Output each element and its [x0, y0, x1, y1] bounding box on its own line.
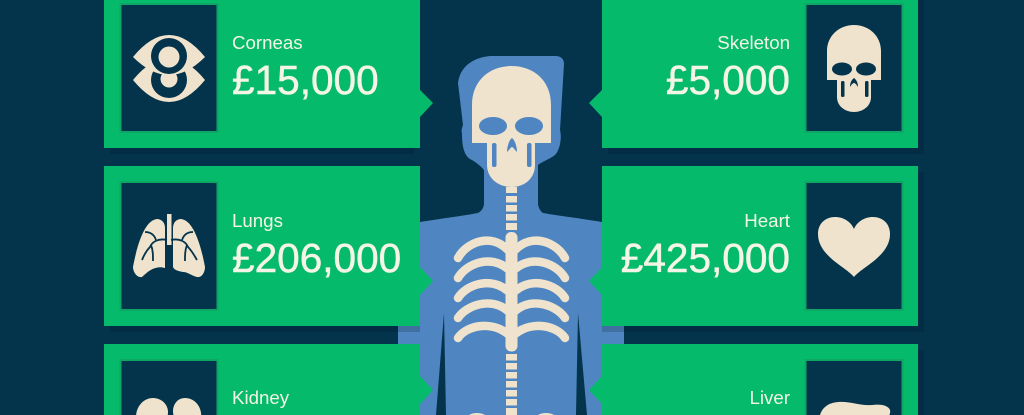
value: £425,000	[621, 235, 790, 281]
vertebrae	[506, 187, 517, 415]
panel: corneas	[104, 0, 433, 148]
icon: heart	[806, 182, 902, 310]
icon: kidneys	[120, 360, 218, 415]
ribs	[458, 241, 565, 338]
panel: lungs	[104, 166, 433, 326]
skeleton	[458, 66, 565, 415]
skull	[472, 66, 551, 187]
label: Corneas	[232, 32, 303, 53]
spine	[506, 232, 518, 352]
pelvis tops	[467, 413, 487, 415]
panel: liver	[589, 344, 918, 415]
panel: skeleton	[589, 0, 918, 148]
arm gap wedges	[436, 313, 446, 415]
icon: eyes	[120, 4, 218, 132]
panel: heart	[589, 166, 918, 326]
value: £5,000	[666, 57, 790, 103]
torso and arms	[398, 185, 624, 415]
value: £206,000	[232, 235, 401, 281]
panel shadows	[110, 0, 924, 415]
icon: liver	[806, 360, 902, 415]
label: Liver	[749, 387, 790, 408]
value: £15,000	[232, 57, 379, 103]
label: Heart	[744, 210, 791, 231]
head silhouette	[458, 56, 564, 190]
label: Kidney	[232, 387, 290, 408]
label: Skeleton	[717, 32, 790, 53]
label: Lungs	[232, 210, 283, 231]
shadow on arms	[398, 326, 420, 332]
body silhouette	[398, 56, 624, 415]
icon: lungs	[120, 182, 218, 310]
panel: kidney	[104, 344, 433, 415]
icon: skull	[806, 4, 902, 132]
